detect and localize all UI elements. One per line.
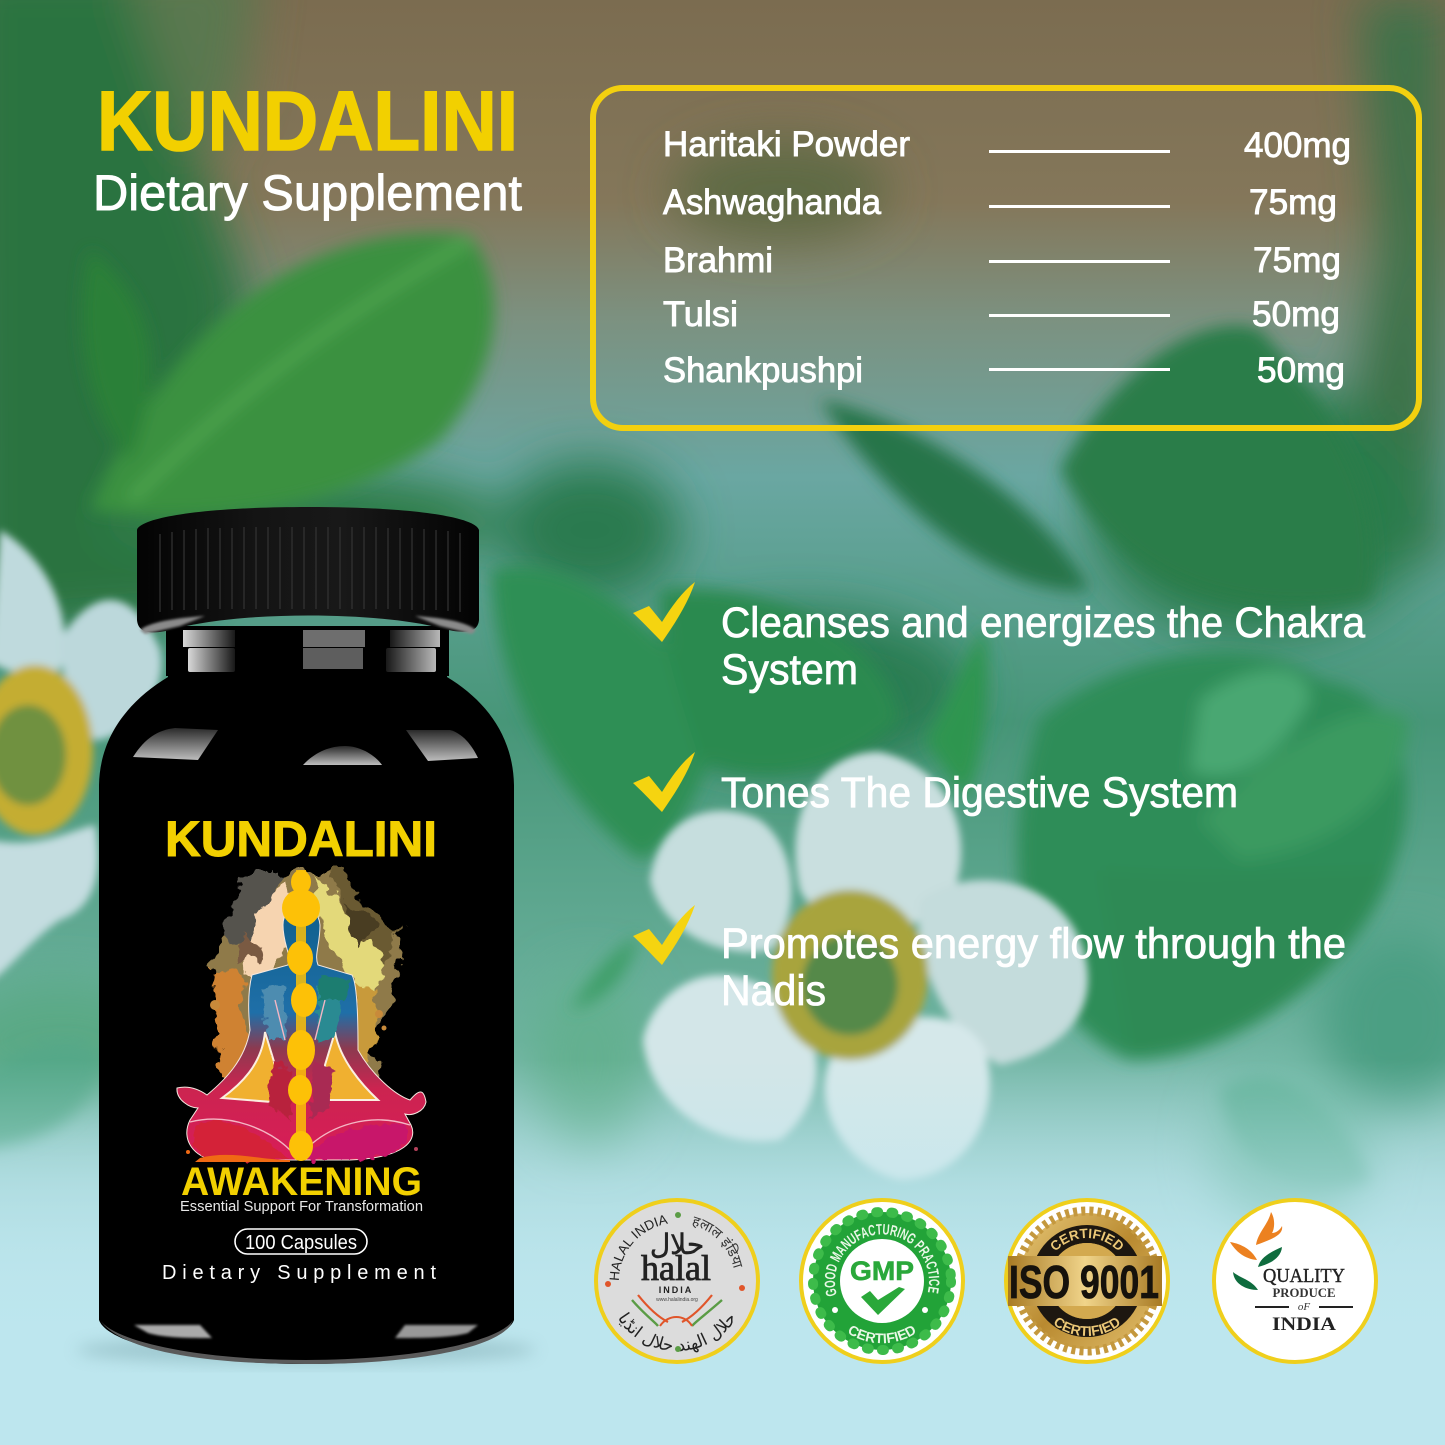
- figure silhouette: [177, 906, 426, 1160]
- benefit: chakra: System: [721, 646, 858, 694]
- badge: halal india: हलाल इंडिया: [692, 1216, 742, 1268]
- benefit: digestive: [633, 752, 1238, 817]
- badge: halal india: www.halalindia.org: [656, 1297, 698, 1303]
- ingredient: Brahmi: [663, 241, 1341, 280]
- ingredient: Haritaki Powder: [663, 125, 1351, 165]
- icon: tricolour leaves: [1230, 1212, 1282, 1290]
- badge: gmp: [799, 1198, 965, 1364]
- benefit: nadis: [633, 905, 1346, 1015]
- ingredient: Tulsi: 50mg: [1252, 295, 1340, 334]
- badge: halal india: INDIA: [659, 1285, 693, 1295]
- chakra column: [282, 870, 320, 1161]
- icon: check: [633, 752, 695, 812]
- ingredient: Ashwaghanda: 75mg: [1249, 183, 1337, 222]
- badge: quality produce of india: QUALITY: [1263, 1265, 1345, 1287]
- neck rings: [166, 626, 449, 676]
- ingredient: Haritaki Powder: Haritaki Powder: [663, 125, 910, 164]
- badge: halal india: halal: [641, 1248, 711, 1288]
- badge: gmp: CERTIFIED: [849, 1326, 915, 1344]
- product bottle: [76, 507, 536, 1364]
- subtitle: Dietary Supplement: [93, 165, 522, 221]
- label: capsule count: 100 Capsules: [245, 1232, 357, 1254]
- badge: halal india: HALAL INDIA: [610, 1215, 668, 1280]
- badge: gmp: GOOD MANUFACTURING PRACTICE: [824, 1224, 940, 1296]
- benefit: nadis: Promotes energy flow through the: [721, 920, 1346, 968]
- ingredient: Ashwaghanda: [663, 183, 1337, 222]
- badge: halal india: حلال: [650, 1228, 704, 1261]
- bottle body: [99, 660, 514, 1364]
- icon: check: [633, 905, 695, 965]
- badge: quality produce of india: INDIA: [1272, 1314, 1336, 1335]
- panel: ingredients: [593, 88, 1419, 428]
- badge: iso 9001: [1004, 1198, 1170, 1364]
- title: [93, 74, 522, 221]
- badge: halal india: [594, 1198, 760, 1364]
- label: awakening: AWAKENING: [181, 1160, 422, 1204]
- ingredient: Brahmi: 75mg: [1253, 241, 1341, 280]
- ingredient: Haritaki Powder: 400mg: [1244, 126, 1351, 165]
- benefit: chakra: [633, 582, 1365, 694]
- label: product name: KUNDALINI: [165, 811, 437, 867]
- ingredient: Shankpushpi: 50mg: [1257, 351, 1345, 390]
- badge: gmp: GMP: [850, 1256, 914, 1286]
- badge: quality produce of india: PRODUCE: [1272, 1285, 1336, 1300]
- bottle cap: [137, 507, 479, 632]
- ingredient: Tulsi: [663, 295, 1340, 334]
- ingredient: Shankpushpi: [663, 351, 1345, 390]
- aura splashes: [212, 872, 402, 1075]
- label: dietary supplement: Dietary Supplement: [162, 1262, 436, 1284]
- badge: quality produce of india: oF: [1298, 1301, 1310, 1313]
- ingredient: Tulsi: Tulsi: [663, 295, 738, 334]
- label: aura and meditating figure: [177, 870, 426, 1162]
- title: KUNDALINI: [97, 74, 518, 168]
- badge: iso 9001: CERTIFIED: [1054, 1318, 1120, 1336]
- ingredient: Shankpushpi: Shankpushpi: [663, 351, 863, 390]
- benefit: nadis: Nadis: [721, 967, 826, 1015]
- badge: halal india: حلال الهند حلال انڈیا: [618, 1312, 733, 1352]
- shoulder highlights: [133, 728, 218, 760]
- label: tagline: Essential Support For Transformation: [180, 1199, 423, 1215]
- icon: check: [633, 582, 695, 642]
- badge: quality produce of india: [1214, 1200, 1376, 1362]
- benefit: digestive: Tones The Digestive System: [721, 769, 1238, 817]
- ingredient: Ashwaghanda: Ashwaghanda: [663, 183, 882, 222]
- benefit: chakra: Cleanses and energizes the Chakra: [721, 599, 1365, 647]
- badge: iso 9001: ISO 9001: [1009, 1256, 1159, 1308]
- badge: iso 9001: CERTIFIED: [1051, 1228, 1123, 1250]
- ingredient: Brahmi: Brahmi: [663, 241, 773, 280]
